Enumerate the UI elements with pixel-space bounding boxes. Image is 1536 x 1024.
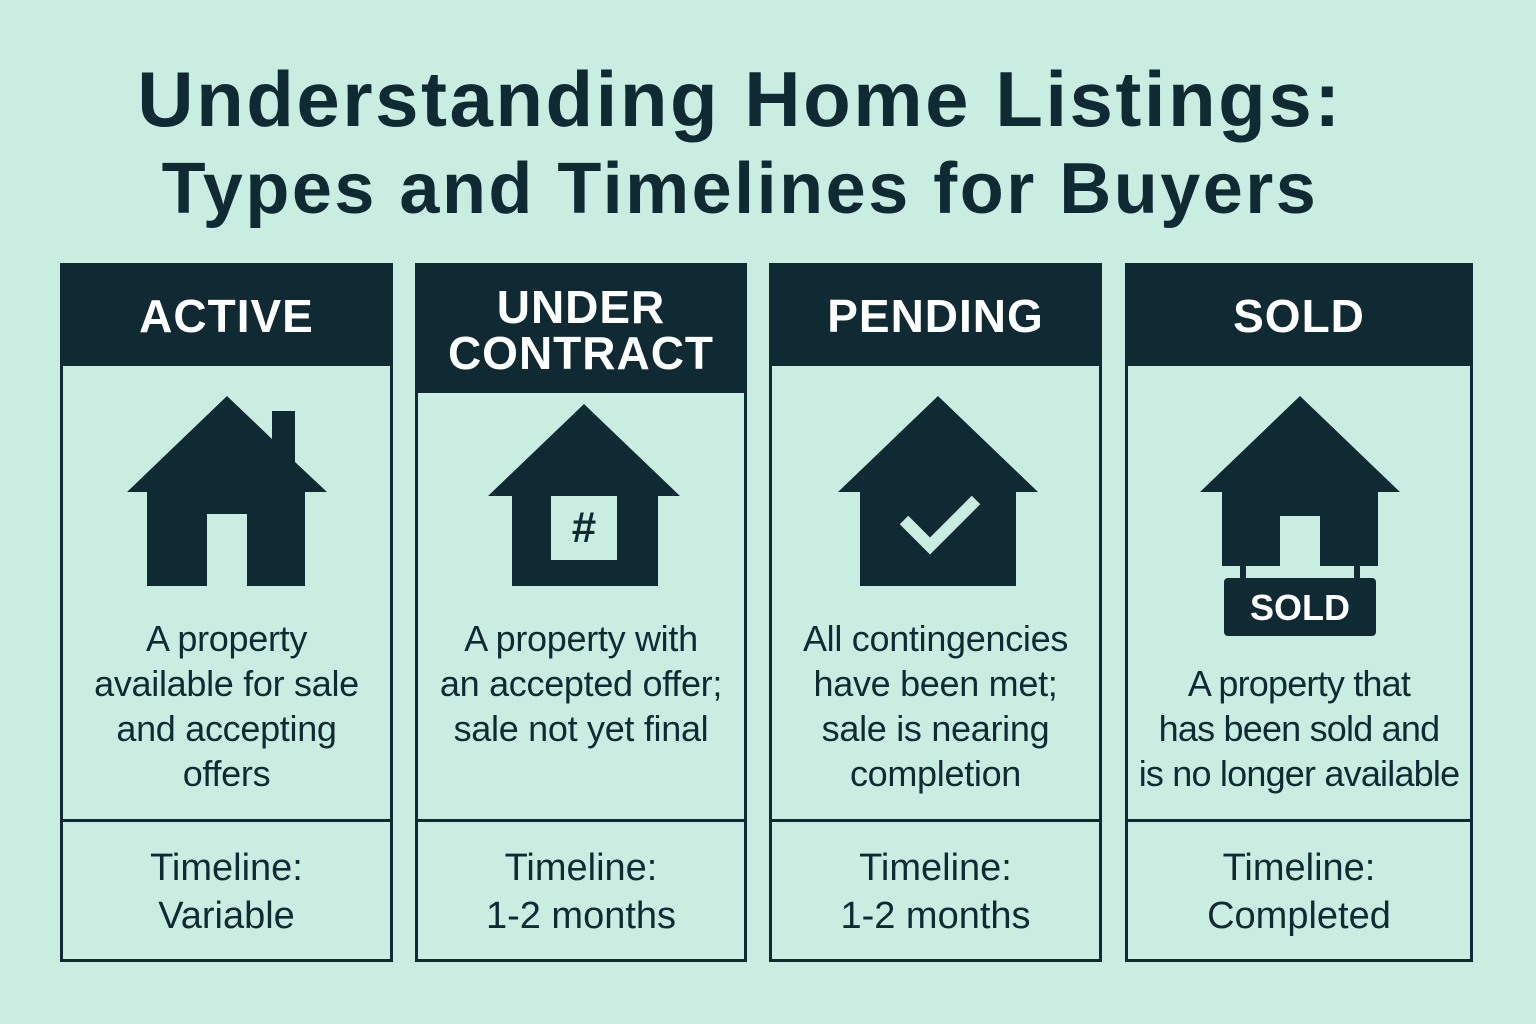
timeline: Completed [1207,895,1391,937]
timeline [63,819,390,959]
timeline: 1-2 months [486,895,676,937]
description: A property that [1188,663,1410,704]
description: sale is nearing [822,708,1049,749]
description: an accepted offer; [440,663,722,704]
timeline: Timeline: [150,847,303,889]
description: All contingencies [803,618,1068,659]
icon: house with sold sign: SOLD [1250,587,1350,628]
timeline [772,819,1099,959]
description: sale not yet final [454,708,708,749]
description: completion [850,753,1021,794]
header: under contract: UNDER [497,281,665,333]
description [1139,663,1459,794]
header: sold [1128,266,1470,366]
description: offers [183,753,270,794]
description [94,618,359,794]
header: pending: PENDING [827,290,1044,342]
timeline: Timeline: [505,847,657,889]
description: has been sold and [1159,708,1439,749]
timeline: Variable [158,895,295,937]
timeline: Timeline: [859,847,1012,889]
timeline [418,819,744,959]
panel: active [60,263,393,962]
panel: sold [1125,263,1473,962]
description: available for sale [94,663,359,704]
icon: house with check [838,396,1038,586]
timeline: 1-2 months [840,895,1031,937]
timeline: Timeline: [1223,847,1375,889]
header: pending [772,266,1099,366]
description [803,618,1068,794]
icon: house with #: # [572,503,596,552]
header: under contract: CONTRACT [448,327,714,379]
description: and accepting [116,708,337,749]
description: is no longer available [1139,753,1459,794]
description: A property [146,618,307,659]
icon: house [127,396,327,586]
icon: house with # [488,404,680,586]
description: A property with [464,618,698,659]
panel: pending [769,263,1102,962]
header: active: ACTIVE [139,290,314,342]
description: have been met; [814,663,1057,704]
icon: house with sold sign [1200,396,1400,636]
subtitle: Types and Timelines for Buyers [162,149,1318,229]
panel: under contract [415,263,747,962]
header: under contract [418,266,744,393]
title: Understanding Home Listings: [137,55,1343,143]
timeline [1128,819,1470,959]
header: active [63,266,390,366]
description [440,618,722,749]
header: sold: SOLD [1233,290,1365,342]
